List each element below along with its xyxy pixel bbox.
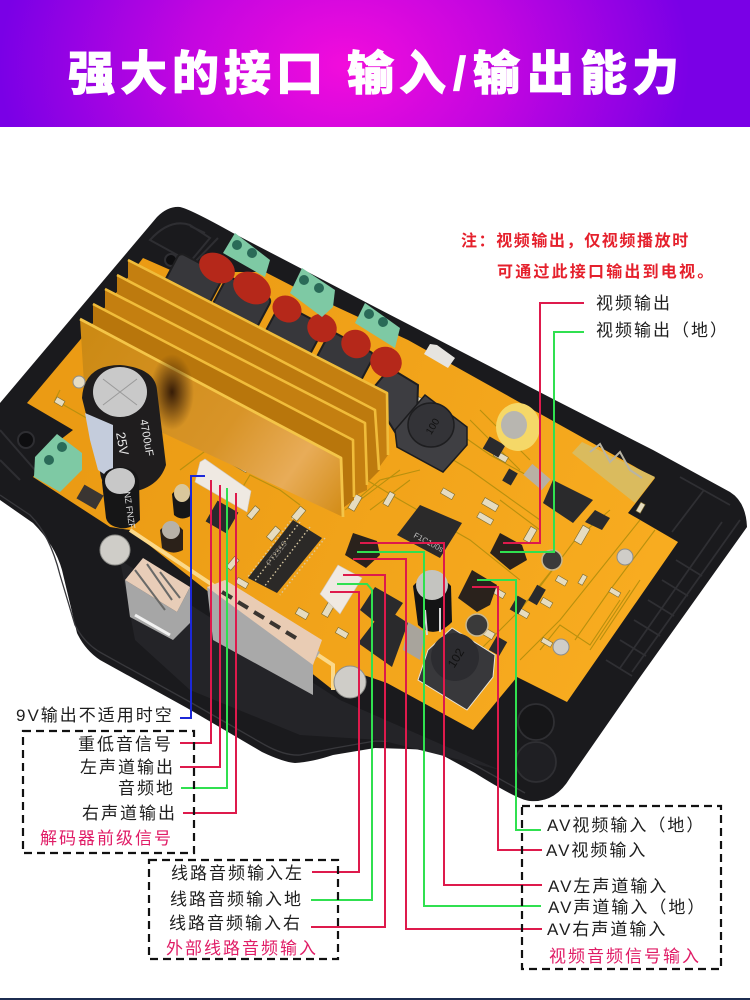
group: decoder preamp signals — [23, 731, 194, 853]
heatsink fins — [80, 260, 388, 517]
line audio input wires — [311, 575, 385, 927]
wire: line input ground — [311, 584, 372, 900]
label: right output: 右声道输出 — [82, 804, 177, 823]
orange circuit board — [27, 258, 678, 730]
large electrolytic capacitor — [82, 365, 166, 493]
large electrolytic capacitor: 25V — [113, 431, 132, 457]
wire: right channel output — [183, 493, 236, 813]
white audio connector — [195, 459, 251, 512]
decoder preamp signal wires — [180, 476, 236, 813]
wire: subwoofer signal — [180, 480, 211, 743]
enclosure inner ridge — [0, 495, 525, 793]
label: line right: 线路音频输入右 — [169, 914, 302, 933]
enclosure right ribs — [516, 477, 740, 782]
label: video output: 视频输出 — [596, 294, 672, 313]
small surface-mount parts — [54, 397, 645, 647]
label: AV right: AV右声道输入 — [547, 920, 667, 939]
label: line left: 线路音频输入左 — [171, 864, 304, 883]
wire: audio ground — [181, 488, 227, 788]
inductor row — [162, 252, 418, 432]
wire: 9V output — [180, 476, 205, 718]
wire: AV video ground — [477, 580, 541, 830]
PCB traces — [55, 390, 655, 660]
label: 9V output: 9V输出不适用时空 — [16, 706, 174, 725]
wire: AV video input — [472, 587, 542, 850]
group caption: 视频音频信号输入 — [549, 947, 701, 966]
red capacitors — [194, 246, 407, 383]
title: 强大的接口 输入/输出能力 — [68, 47, 679, 100]
small electrolytic capacitor: NZ FNZF — [122, 491, 137, 530]
video output wires — [500, 303, 584, 552]
heatsink capacitor reflection — [150, 354, 194, 430]
mid board capacitor — [413, 570, 452, 635]
group caption: 解码器前级信号 — [40, 829, 173, 848]
lower case recess — [120, 560, 500, 770]
infrared sensor — [424, 344, 455, 368]
label: subwoofer: 重低音信号 — [78, 735, 173, 754]
main chip F1C100s: F1C100s — [412, 531, 445, 554]
note line 2: 可通过此接口输出到电视。 — [497, 262, 715, 281]
label: AV video ground: AV视频输入（地） — [547, 816, 705, 835]
wire: AV left channel — [360, 543, 542, 885]
label: line ground: 线路音频输入地 — [170, 890, 303, 909]
wire: AV right channel — [353, 559, 542, 929]
group: external line audio input — [149, 860, 338, 959]
note text — [461, 231, 715, 281]
USB socket — [125, 558, 190, 640]
small electrolytic capacitor — [102, 467, 140, 530]
note line 1: 注：视频输出，仅视频播放时 — [461, 231, 690, 250]
video output labels — [596, 294, 729, 340]
enclosure top-left ribs — [0, 223, 218, 480]
board front edge — [130, 530, 333, 690]
large inductor 100 — [395, 395, 467, 472]
mounting screws — [73, 376, 633, 698]
label: AV left: AV左声道输入 — [548, 877, 668, 896]
black enclosure — [0, 207, 747, 801]
wire: line input left — [312, 592, 359, 872]
label: left output: 左声道输出 — [80, 758, 175, 777]
group caption: 外部线路音频输入 — [166, 939, 318, 958]
bottom inductor 102: 102 — [445, 646, 467, 670]
header banner — [0, 0, 750, 127]
bottom inductor 102 — [418, 628, 495, 710]
label: AV video: AV视频输入 — [546, 841, 647, 860]
board chips near inductor — [358, 480, 610, 667]
large inductor 100: 100 — [424, 416, 443, 437]
bluetooth antenna — [572, 442, 655, 503]
label: audio ground: 音频地 — [118, 779, 175, 798]
wire: AV audio ground — [357, 552, 541, 906]
white line-in connector — [320, 565, 362, 614]
label: AV audio ground: AV声道输入（地） — [548, 898, 706, 917]
audio processor chip PT2313: PT2313 — [264, 539, 289, 567]
green screw terminals — [34, 233, 400, 492]
wire: line input right — [311, 575, 385, 927]
wire: video output — [503, 303, 584, 543]
dashed box — [23, 731, 194, 853]
bottom edge strip — [0, 998, 750, 1000]
dashed box — [149, 860, 338, 959]
group: video and audio signal input — [522, 806, 721, 969]
SD card slot — [207, 580, 322, 695]
black jumper sockets — [345, 533, 527, 612]
tiny capacitors — [160, 484, 192, 553]
main chip F1C100s — [397, 505, 462, 558]
wire: left channel output — [180, 485, 220, 767]
AV input wires — [353, 543, 542, 929]
dashed box — [522, 806, 721, 969]
coin cell battery — [496, 403, 540, 451]
label: video output ground: 视频输出（地） — [596, 321, 729, 340]
large electrolytic capacitor: 4700uF — [137, 418, 155, 458]
audio processor chip PT2313 — [247, 518, 325, 595]
small chips and crystal — [76, 436, 562, 656]
wire: video output ground — [500, 332, 584, 552]
product photo: decoder board in black enclosure — [0, 207, 747, 801]
